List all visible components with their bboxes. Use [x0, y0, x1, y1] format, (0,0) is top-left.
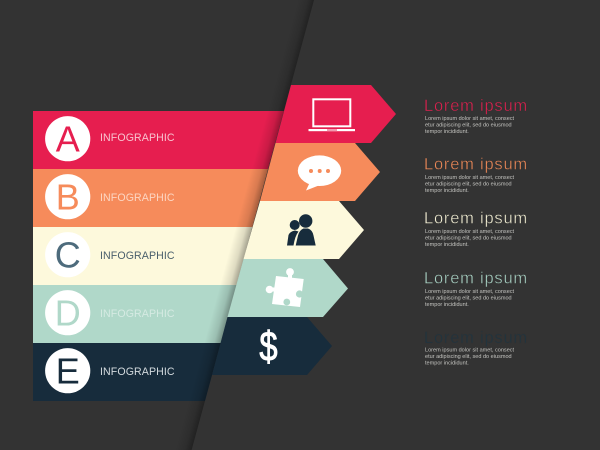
bar D	[33, 285, 236, 343]
text block A	[424, 97, 528, 135]
bar A	[33, 111, 284, 169]
panel: left letter bars	[33, 111, 284, 401]
bar E	[33, 343, 221, 401]
arrow A with laptop icon	[276, 85, 396, 143]
text block E	[424, 329, 528, 367]
fold shadow	[172, 0, 314, 450]
icon: people	[287, 214, 316, 246]
row C label: INFOGRAPHIC	[100, 250, 175, 262]
text block D: Lorem ipsum	[424, 270, 528, 288]
row D label: INFOGRAPHIC	[100, 308, 175, 320]
text block E: Lorem ipsum	[424, 329, 528, 347]
text block E: tempor incididunt.	[425, 361, 469, 367]
row B label	[45, 174, 175, 219]
bar B	[33, 169, 268, 227]
text block C	[424, 210, 528, 248]
text block C: etur adipiscing elit, sed do eiusmod	[425, 236, 512, 242]
row E label: E	[56, 350, 80, 392]
arrow B with speech bubble icon	[260, 143, 380, 201]
arrow D with puzzle icon	[228, 259, 348, 317]
icon: dollar sign: $	[259, 323, 278, 369]
text block A: tempor incididunt.	[425, 129, 469, 135]
text block B: Lorem ipsum	[424, 156, 528, 174]
bar C	[33, 227, 252, 285]
row A label: INFOGRAPHIC	[100, 132, 175, 144]
arrow E with dollar icon	[212, 317, 332, 375]
text block A: Lorem ipsum	[424, 97, 528, 115]
text block E: Lorem ipsum dolor sit amet, consect	[425, 348, 515, 354]
text block B: tempor incididunt.	[425, 188, 469, 194]
row B label: INFOGRAPHIC	[100, 192, 175, 204]
panel: right arrows	[212, 85, 396, 375]
text block B	[424, 156, 528, 194]
row E label	[45, 348, 175, 393]
text block D: etur adipiscing elit, sed do eiusmod	[425, 296, 512, 302]
text block C: tempor incididunt.	[425, 242, 469, 248]
text block A: etur adipiscing elit, sed do eiusmod	[425, 123, 512, 129]
icon: laptop	[308, 99, 355, 131]
text block E: etur adipiscing elit, sed do eiusmod	[425, 354, 512, 360]
text block D: tempor incididunt.	[425, 302, 469, 308]
row A label	[45, 116, 175, 161]
row E label: INFOGRAPHIC	[100, 366, 175, 378]
row A label: A	[56, 118, 80, 160]
row D label: D	[55, 292, 81, 334]
text block C: Lorem ipsum	[424, 210, 528, 228]
icon: puzzle piece	[266, 268, 304, 307]
text block B: Lorem ipsum dolor sit amet, consect	[425, 175, 515, 181]
text block D	[424, 270, 528, 308]
text block D: Lorem ipsum dolor sit amet, consect	[425, 289, 515, 295]
text block B: etur adipiscing elit, sed do eiusmod	[425, 182, 512, 188]
arrow C with people icon	[244, 201, 364, 259]
text block A: Lorem ipsum dolor sit amet, consect	[425, 116, 515, 122]
row B label: B	[56, 176, 80, 218]
row C label	[45, 232, 175, 277]
text block C: Lorem ipsum dolor sit amet, consect	[425, 229, 515, 235]
icon: speech bubble	[298, 155, 341, 190]
row D label	[45, 290, 175, 335]
row C label: C	[55, 234, 81, 276]
